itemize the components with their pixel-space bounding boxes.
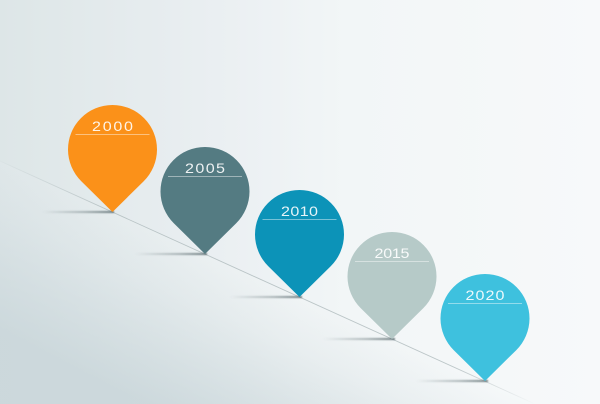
pin 2015 [348, 232, 436, 339]
pin shadow 2020 [416, 380, 488, 382]
diagonal timeline [0, 161, 535, 404]
pin 2020: 2020 [466, 288, 504, 304]
floor wedge [0, 161, 535, 404]
pin 2010 [255, 190, 344, 297]
pin 2005 [160, 147, 250, 254]
pin 2020 [440, 274, 530, 381]
pin 2015: 2015 [375, 246, 409, 262]
floor lower shading [0, 161, 535, 404]
pin shadow 2005 [135, 253, 207, 255]
pin 2000: 2000 [92, 119, 133, 135]
pin 2010: 2010 [281, 204, 318, 220]
pin shadow 2015 [323, 338, 395, 340]
pin 2000 [68, 105, 157, 212]
pin 2005: 2005 [185, 161, 225, 177]
pin shadow 2000 [42, 211, 114, 213]
pin shadow 2010 [230, 296, 302, 298]
